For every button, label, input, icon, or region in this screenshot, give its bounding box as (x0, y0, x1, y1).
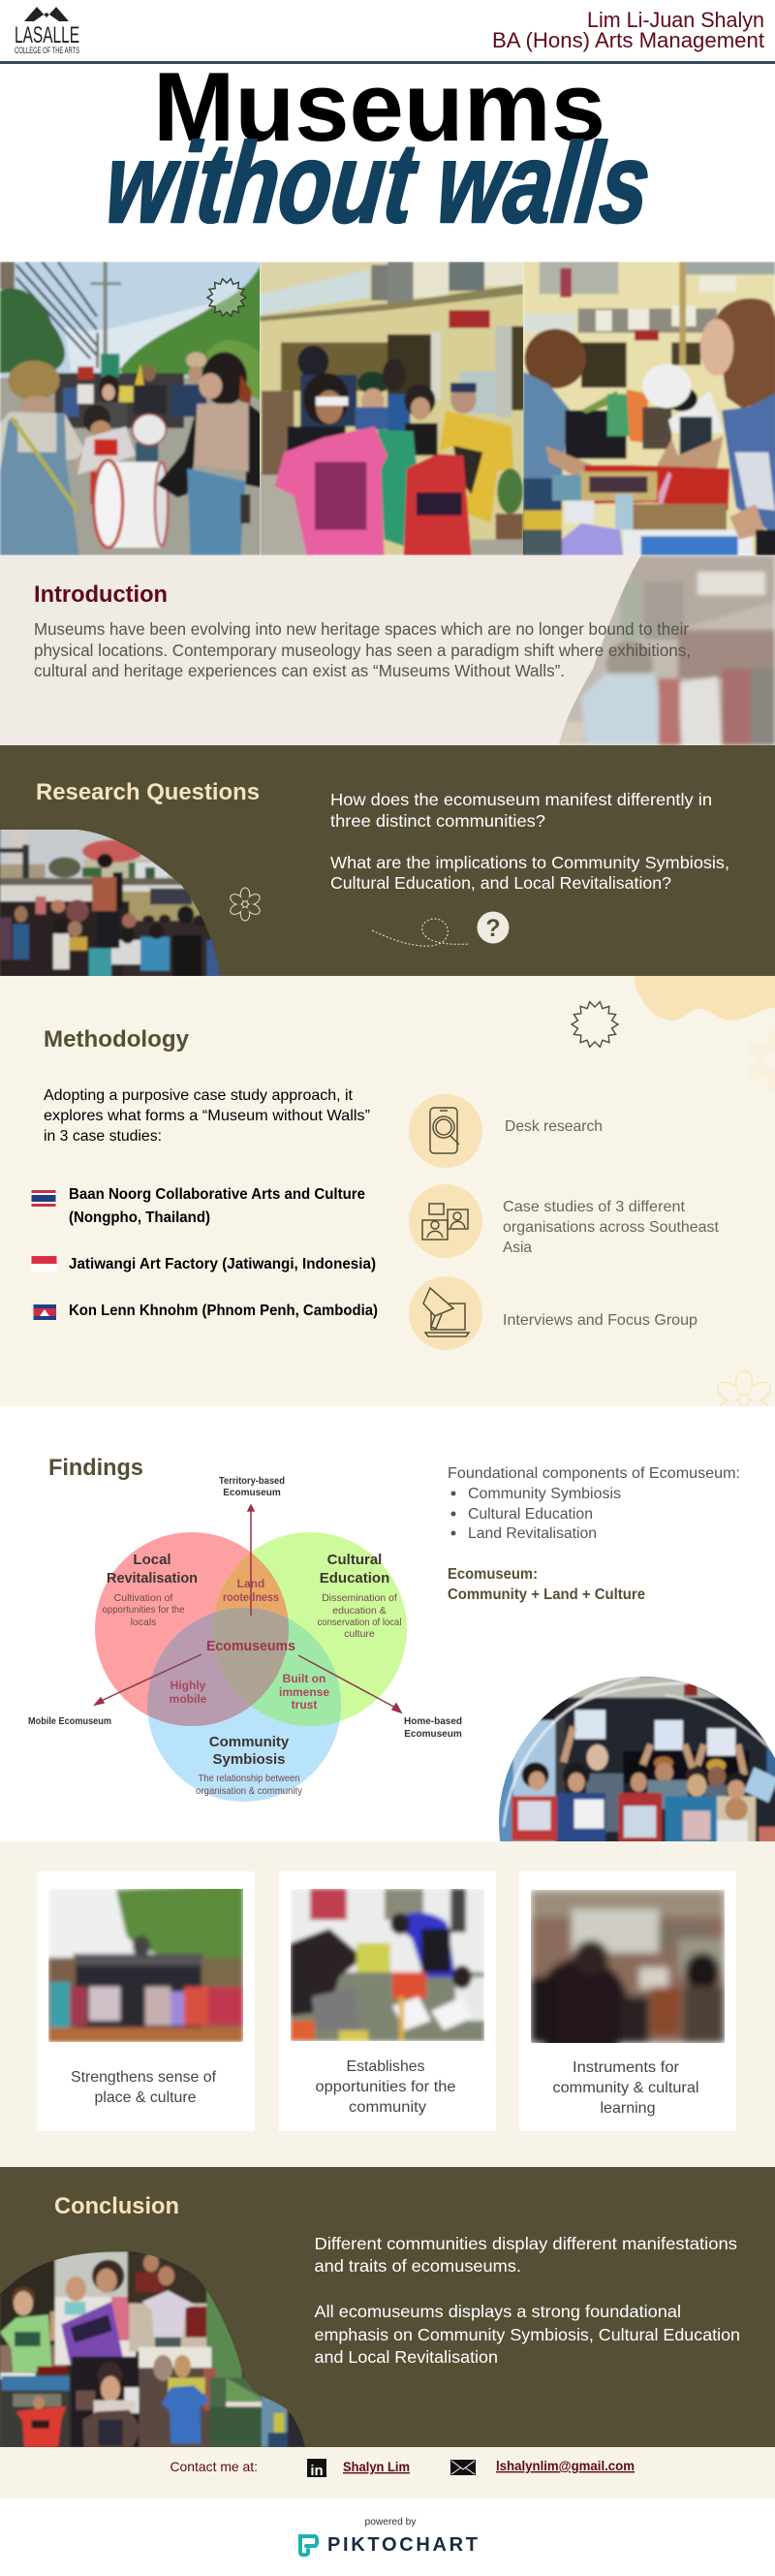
venn labels: Home-based (404, 1716, 462, 1727)
photo: faded street crowd (552, 555, 775, 745)
venn labels: trust (292, 1698, 317, 1712)
text: approach: in 3 case studies: (44, 1128, 162, 1145)
photo: talk in library (531, 1890, 725, 2043)
venn labels: locals (131, 1617, 156, 1628)
heading: Conclusion: Conclusion (54, 2193, 179, 2219)
icon: mail (450, 2460, 476, 2475)
caption: community & cultural (552, 2080, 699, 2096)
card: instruments (519, 1871, 736, 2131)
caption: Instruments for (573, 2059, 680, 2076)
text: foundational components (448, 1465, 740, 1542)
wordmark: PIKTOCHART (327, 2534, 478, 2556)
photo: t-shirt collage (0, 2248, 310, 2447)
icon: flag of Cambodia (33, 1304, 56, 1320)
venn labels: opportunities for the (103, 1604, 185, 1616)
icon: question mark (477, 911, 510, 944)
panel: introduction (0, 555, 775, 745)
logo: LASALLE (15, 7, 79, 55)
text: conclusion: emphasis on Community Symbiosis, Cultural Education (314, 2325, 740, 2344)
venn diagram (28, 1476, 462, 1802)
venn labels (28, 1476, 462, 1797)
text: ecomuseum formula: Community + Land + Culture (448, 1586, 645, 1603)
venn labels: Education (320, 1570, 389, 1586)
caption: place & culture (95, 2089, 197, 2106)
icon: flag of Indonesia (31, 1256, 56, 1272)
venn labels: rootedness (223, 1590, 279, 1604)
photo: screen printing stall (516, 262, 775, 555)
text: conclusion: and Local Revitalisation (314, 2347, 498, 2367)
heading: Research Questions: Research Questions (36, 779, 260, 805)
venn labels: Cultivation of (114, 1592, 172, 1604)
panel: findings (0, 1406, 775, 1843)
text: approach: Adopting a purposive case study approach, it (44, 1087, 354, 1104)
text: conclusion: All ecomuseums displays a strong foundational (314, 2302, 681, 2321)
photo: crowd on field (0, 827, 232, 977)
text: intro body: cultural and heritage experiences can exist as “Museums Without Walls”. (34, 661, 565, 680)
text: research questions: What are the implications to Community Symbiosis, (330, 853, 729, 872)
caption (552, 2059, 699, 2117)
venn labels: Ecomuseum (223, 1488, 281, 1498)
text: ecomuseum formula (448, 1566, 645, 1603)
text: research questions: Cultural Education, and Local Revitalisation? (330, 873, 671, 893)
decorative corner flower (715, 1371, 773, 1429)
text: research questions (330, 790, 729, 893)
icon: dotted looping line (372, 919, 470, 946)
author name: Lim Li-Juan Shalyn (587, 8, 764, 32)
icon: star outline (572, 1002, 618, 1047)
photo: street parade (0, 262, 262, 555)
case study: Baan Noorg (69, 1186, 365, 1226)
text: ecomuseum formula: Ecomuseum: (448, 1566, 538, 1583)
photo: children drawing on floor (291, 1889, 484, 2041)
photo: group with drawings, circular (494, 1672, 775, 1843)
venn labels: Highly (170, 1679, 206, 1692)
text: foundational components: Cultural Education (468, 1506, 593, 1523)
venn labels: Cultural (327, 1552, 382, 1568)
icon: video chat (409, 1184, 482, 1258)
venn labels: organisation & community (196, 1785, 303, 1797)
venn labels: Mobile Ecomuseum (28, 1716, 111, 1727)
photo: villagers by black wall (48, 1885, 243, 2042)
case study: Baan Noorg: Baan Noorg Collaborative Arts and Culture (69, 1186, 365, 1203)
caption: Establishes (347, 2058, 424, 2075)
caption: opportunities for the (316, 2079, 456, 2095)
venn labels: education & (332, 1605, 387, 1617)
venn labels: culture (344, 1628, 375, 1640)
caption: learning (601, 2100, 655, 2117)
icon: outlined star on photo (207, 279, 246, 316)
link: linkedin name: Shalyn Lim (343, 2459, 410, 2474)
venn labels: Revitalisation (107, 1570, 198, 1586)
text: conclusion: and traits of ecomuseums. (314, 2256, 521, 2276)
panel: contact (0, 2447, 775, 2498)
decorative faint flower (744, 1029, 775, 1091)
header bar (0, 0, 775, 64)
text: approach: explores what forms a “Museum without Walls” (44, 1108, 370, 1124)
venn labels: mobile (170, 1692, 207, 1706)
icon: flower outline (230, 888, 261, 921)
venn labels: immense (279, 1685, 329, 1699)
text: approach (44, 1087, 370, 1145)
case study: Baan Noorg: (Nongpho, Thailand) (69, 1209, 210, 1226)
author name (492, 8, 764, 52)
text: foundational components: Land Revitalisation (468, 1525, 597, 1542)
text: research questions: How does the ecomuseum manifest differently in (330, 790, 712, 809)
text: interviews: Interviews and Focus Group (503, 1312, 698, 1329)
text: case studies: organisations across Southeast (503, 1219, 720, 1236)
venn labels: Local (133, 1552, 171, 1568)
text: intro body: physical locations. Contemporary museology has seen a paradigm shift where exhibitions, (34, 641, 691, 660)
footer: powered by Piktochart (0, 2498, 775, 2576)
venn labels: The relationship between (198, 1773, 300, 1784)
text: conclusion: Different communities display different manifestations (314, 2234, 737, 2253)
case study: Kon Lenn Khnohm: Kon Lenn Khnohm (Phnom Penh, Cambodia) (69, 1303, 378, 1319)
footer: powered by Piktochart: powered by (364, 2517, 417, 2528)
text: case studies (503, 1199, 720, 1256)
case study: Jatiwangi: Jatiwangi Art Factory (Jatiwangi, Indonesia) (69, 1256, 376, 1272)
venn labels: Community (209, 1734, 290, 1750)
text: research questions: three distinct communities? (330, 811, 545, 831)
photo: kids with t-shirts (260, 262, 525, 555)
panel: key findings cards (0, 1841, 775, 2167)
arrows (95, 1505, 401, 1712)
caption: Strengthens sense of (71, 2069, 217, 2086)
text: case studies: Asia (503, 1240, 532, 1256)
icon: linkedin: in (310, 2463, 324, 2479)
venn labels: Symbiosis (212, 1751, 286, 1768)
heading: Introduction: Introduction (34, 581, 168, 608)
photo strip (0, 262, 775, 555)
decorative blob (634, 976, 775, 1021)
caption (71, 2069, 217, 2106)
venn labels: Territory-based (219, 1476, 285, 1487)
text: case studies: Case studies of 3 different (503, 1199, 686, 1215)
text: contact label: Contact me at: (170, 2459, 258, 2474)
heading: Methodology: Methodology (44, 1026, 190, 1052)
logo: LASALLE: COLLEGE OF THE ARTS (15, 46, 79, 55)
text: desk research: Desk research (505, 1118, 603, 1135)
title: Museums (153, 53, 605, 162)
panel: methodology (0, 976, 775, 1429)
icon: question mark: ? (485, 915, 501, 942)
title (100, 53, 656, 246)
card: opportunities (279, 1871, 496, 2131)
text: foundational components: Foundational components of Ecomuseum: (448, 1465, 740, 1482)
link: email: lshalynlim@gmail.com (496, 2458, 635, 2473)
logo: LASALLE: LASALLE (15, 22, 79, 48)
caption: community (349, 2099, 426, 2116)
caption (316, 2058, 456, 2116)
venn labels: Dissemination of (322, 1592, 397, 1604)
venn labels: Built on (283, 1672, 326, 1685)
venn labels: conservation of local (318, 1617, 401, 1628)
icon: phone and magnifier (409, 1094, 482, 1168)
text: foundational components: Community Symbiosis (468, 1486, 621, 1502)
icon: flag of Thailand (31, 1190, 56, 1207)
icon: linkedin (307, 2459, 326, 2479)
icon: piktochart logo (300, 2536, 317, 2555)
card: sense of place (37, 1871, 255, 2131)
venn labels: Ecomuseum (404, 1729, 462, 1740)
author name: BA (Hons) Arts Management (492, 28, 764, 52)
icon: megaphone and laptop (409, 1276, 482, 1350)
text: intro body: Museums have been evolving into new heritage spaces which are no longer bound to their (34, 619, 689, 639)
venn labels: Ecomuseums (206, 1638, 295, 1654)
text: intro body (34, 619, 691, 680)
text: conclusion (314, 2234, 740, 2367)
panel: conclusion (0, 2167, 775, 2447)
panel: research questions (0, 745, 775, 977)
venn labels: Land (237, 1577, 264, 1590)
heading: Findings: Findings (48, 1455, 143, 1481)
